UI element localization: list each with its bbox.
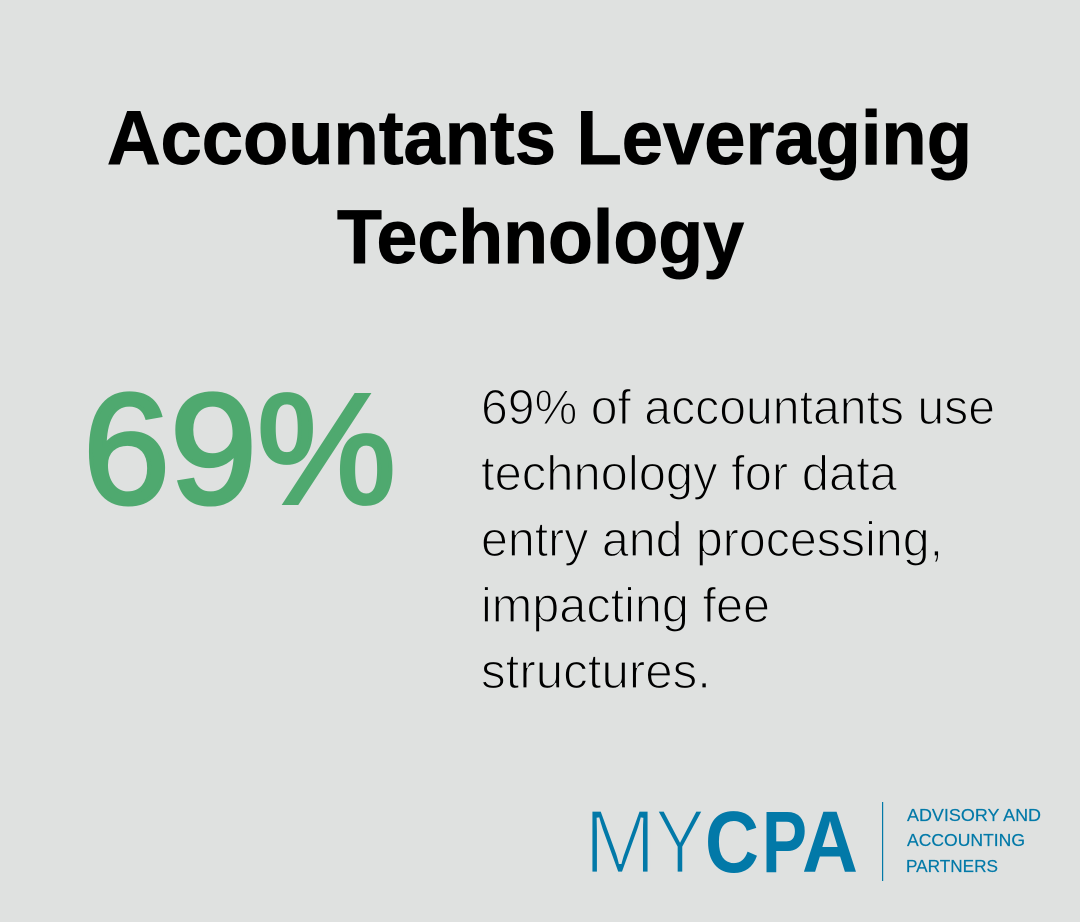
description text: impacting fee <box>481 579 770 633</box>
logo wordmark thin part: MY <box>584 792 705 893</box>
logo wordmark bold part: CPA <box>705 794 858 891</box>
logo divider <box>882 802 883 881</box>
description text: entry and processing, <box>481 513 943 567</box>
logo wordmark bold part: CPA: A <box>802 794 858 891</box>
logo tagline: ACCOUNTING <box>907 830 1025 850</box>
logo: MYCPA advisory and accounting partners <box>584 792 1041 893</box>
big statistic: 69%: 69% <box>83 362 396 537</box>
logo wordmark thin part: MY: M <box>584 792 656 893</box>
logo wordmark bold part: CPA: P <box>762 794 807 891</box>
logo tagline: PARTNERS <box>906 856 998 876</box>
title: Accountants Leveraging <box>107 96 972 181</box>
logo tagline <box>906 805 1041 876</box>
description text: technology for data <box>481 447 898 501</box>
description text: 69% of accountants use <box>481 381 995 435</box>
description text <box>481 381 995 699</box>
title: Technology <box>337 195 744 280</box>
logo wordmark bold part: CPA: C <box>705 794 759 891</box>
title <box>107 96 972 280</box>
logo tagline: ADVISORY AND <box>907 805 1041 825</box>
logo wordmark thin part: MY: Y <box>655 792 705 893</box>
description text: structures. <box>481 645 711 699</box>
